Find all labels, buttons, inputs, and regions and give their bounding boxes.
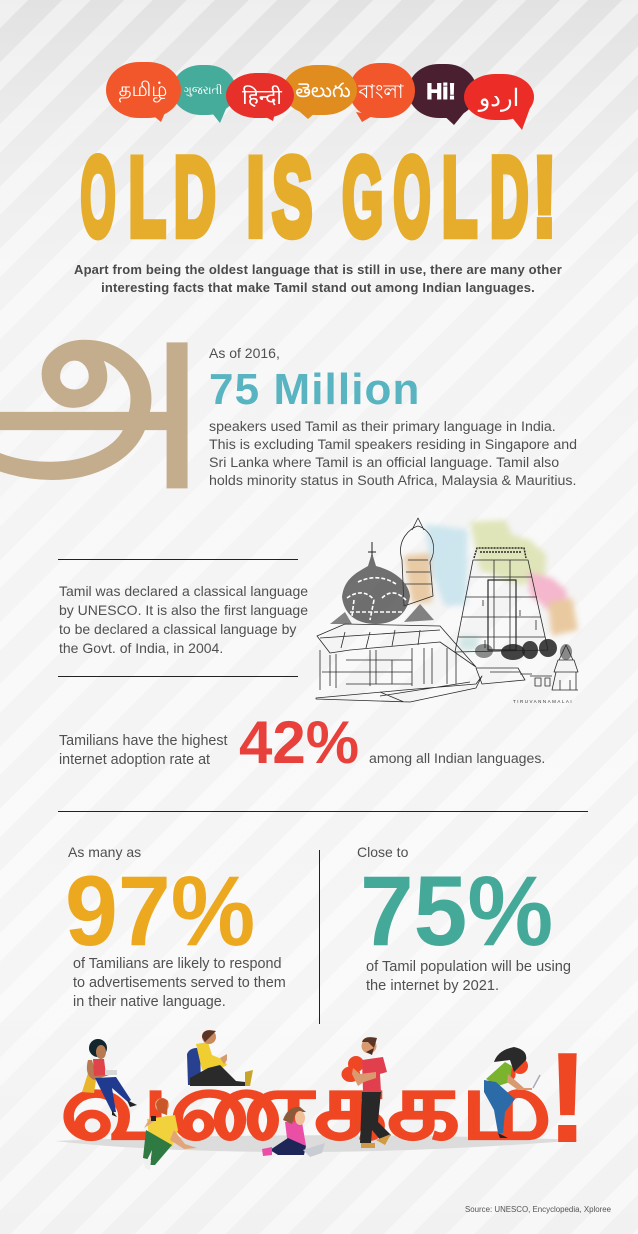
person: girl with laptop [262, 1107, 325, 1157]
description: This is excluding Tamil speakers residing in Singapore and [209, 437, 577, 453]
person: seated man with phone [187, 1030, 253, 1086]
person: woman with laptop [484, 1047, 540, 1138]
temple illustration [316, 517, 581, 704]
title: O [81, 136, 115, 260]
speech bubbles: languages [106, 62, 534, 130]
bubble: Gujarati [172, 65, 236, 123]
description: to advertisements served to them [73, 975, 286, 991]
stat: 75 Million [209, 345, 577, 489]
subtitle: Apart from being the oldest language that is still in use, there are many other [74, 262, 562, 277]
bubble: Telugu [283, 65, 357, 119]
title: D [490, 135, 529, 260]
lead-in: As of 2016, [209, 345, 280, 361]
lead-in: Close to [357, 844, 408, 860]
gopuram [455, 560, 548, 652]
scribbled dome [330, 542, 434, 624]
classical language text: Tamil was declared a classical language [59, 583, 308, 599]
title: L [442, 134, 477, 259]
trailing text: among all Indian languages. [369, 750, 545, 766]
bubble: Bangla: বাংলা [357, 81, 405, 103]
roof and hall [317, 624, 476, 667]
title: I [246, 134, 265, 260]
classical language text: the Govt. of India, in 2004. [59, 640, 223, 656]
bubble: Hindi [226, 73, 294, 121]
classical language text [59, 583, 308, 656]
title: O [394, 135, 431, 260]
bubble: Gujarati: ગુજરાતી [184, 83, 222, 97]
stat: 75% [357, 844, 571, 994]
person: man on the ground [143, 1098, 197, 1170]
subtitle [74, 262, 562, 295]
number: 75 Million [209, 365, 420, 414]
greeting word: ! [546, 1026, 589, 1170]
classical language text: to be declared a classical language by [59, 621, 296, 637]
person: woman with tablet [82, 1039, 137, 1117]
bubble: Hindi: हिन्दी [242, 85, 282, 109]
bubble: Telugu: తెలుగు [295, 80, 351, 102]
title [80, 134, 557, 260]
stat: 42% internet adoption [59, 709, 545, 776]
greeting word: வணக்கம் [60, 1053, 552, 1159]
lead-in: Tamilians have the highest [59, 733, 227, 749]
description [209, 419, 577, 489]
title: L [128, 135, 166, 260]
person: man with beard [348, 1037, 391, 1148]
description: holds minority status in South Africa, Malaysia & Mauritius. [209, 473, 576, 489]
temple illustration: TIRUVANNAMALAI [513, 699, 573, 704]
number: 97% [65, 855, 255, 966]
subtitle: interesting facts that make Tamil stand out among Indian languages. [101, 280, 535, 295]
source: Source: UNESCO, Encyclopedia, Xploree [465, 1205, 611, 1214]
description: speakers used Tamil as their primary language in India. [209, 419, 556, 435]
description [366, 959, 571, 994]
description: in their native language. [73, 994, 226, 1010]
title: G [342, 134, 383, 260]
bubble: Urdu: اردو [478, 85, 519, 112]
bubble: Hi [408, 64, 477, 125]
description: of Tamilians are likely to respond [73, 956, 282, 972]
lead-in [59, 733, 228, 768]
small shrine [552, 645, 578, 690]
description: Sri Lanka where Tamil is an official language. Tamil also [209, 455, 559, 471]
lead-in: As many as [68, 844, 141, 860]
title: D [174, 134, 216, 259]
bubble: Urdu [464, 74, 534, 130]
bubble: Hi: Hi! [426, 79, 456, 104]
description: of Tamil population will be using [366, 959, 571, 975]
number: 42% [239, 709, 359, 776]
trees [475, 639, 572, 660]
number: 75% [360, 855, 553, 966]
title: ! [532, 135, 557, 260]
title: S [272, 136, 312, 260]
bubble: Tamil: தமிழ் [119, 79, 167, 102]
description: the internet by 2021. [366, 978, 499, 994]
lead-in: internet adoption rate at [59, 752, 210, 768]
classical language text: by UNESCO. It is also the first language [59, 602, 308, 618]
stat: 97% [65, 844, 286, 1010]
bubble: Tamil [106, 62, 181, 122]
bubble: Bangla [349, 63, 415, 122]
description [73, 956, 286, 1010]
tower with carved arch [401, 518, 434, 606]
